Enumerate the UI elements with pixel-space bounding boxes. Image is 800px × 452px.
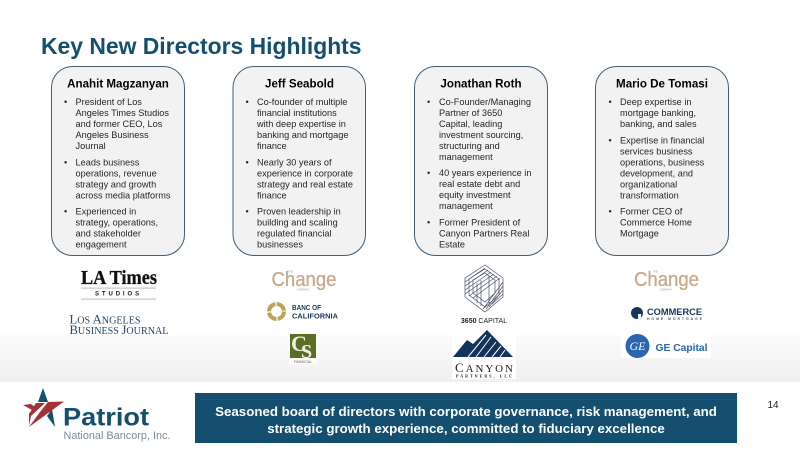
bullets: Jonathan Roth: structuring and — [439, 141, 500, 151]
logo: The Change Company (De Tomasi): THE — [653, 270, 658, 274]
bullets: Jonathan Roth: • — [427, 97, 430, 107]
bullets: Anahit Magzanyan: and former CEO, Los — [76, 119, 163, 129]
logo: Patriot National Bancorp: National Bancorp, Inc. — [64, 430, 170, 442]
bullets: Jonathan Roth — [427, 97, 531, 250]
bullets: Anahit Magzanyan: Journal — [76, 141, 106, 151]
logo: The Change Company (Seabold): THE — [288, 270, 293, 274]
logo: GE Capital: GE Capital — [656, 342, 708, 354]
name: Jonathan Roth: Jonathan Roth — [440, 78, 522, 90]
logo: Los Angeles Business Journal — [70, 312, 168, 337]
bullets: Jonathan Roth: • — [427, 218, 430, 228]
name: Anahit Magzanyan: Anahit Magzanyan — [67, 78, 169, 90]
logo: CS Financial: S — [301, 341, 312, 363]
logo: Canyon Partners: PARTNERS, LLC — [456, 374, 512, 378]
bullets: Mario De Tomasi: development, and — [620, 168, 693, 178]
logo: Canyon Partners — [452, 329, 516, 379]
bullets: Mario De Tomasi: • — [608, 136, 612, 146]
bullets: Anahit Magzanyan: engagement — [76, 240, 127, 250]
logo: LA Times Studios: STUDIOS — [95, 292, 142, 298]
bullets: Anahit Magzanyan: operations, revenue — [76, 168, 157, 178]
icon: star — [23, 388, 64, 427]
bullets: Jonathan Roth: • — [427, 168, 430, 178]
bullets: Jonathan Roth: investment sourcing, — [439, 130, 523, 140]
logo: LA Times Studios — [81, 267, 157, 300]
bullets: Anahit Magzanyan: • — [64, 158, 67, 168]
bullets: Mario De Tomasi: Former CEO of — [620, 206, 683, 216]
logo: Canyon Partners: CANYON — [455, 360, 513, 375]
bullets: Anahit Magzanyan: President of Los — [76, 97, 142, 107]
bullets: Mario De Tomasi: organizational — [620, 180, 677, 190]
bullets: Jeff Seabold: regulated financial — [257, 228, 332, 238]
logo: Commerce Home Mortgage: COMMERCE — [647, 307, 702, 317]
logo: GE Capital: GE — [630, 339, 646, 353]
bullets: Mario De Tomasi: Commerce Home — [620, 218, 692, 228]
bullets: Jonathan Roth: Canyon Partners Real — [439, 228, 529, 238]
logo: Banc of California: CALIFORNIA — [292, 314, 338, 320]
bullets: Jeff Seabold: Co-founder of multiple — [257, 97, 347, 107]
logo: LA Times Studios: LA Times — [81, 267, 157, 289]
logo: Commerce Home Mortgage — [631, 307, 703, 321]
bullets: Jeff Seabold: building and scaling — [257, 218, 338, 228]
bullets: Anahit Magzanyan: strategy and growth — [76, 180, 156, 190]
panel: Jonathan Roth — [414, 66, 548, 256]
bullets: Jonathan Roth: Capital, leading — [439, 119, 502, 129]
logo: Los Angeles Business Journal: BUSINESS JOURNAL — [70, 323, 168, 337]
bullets: Jonathan Roth: management — [439, 152, 493, 162]
bullets: Jonathan Roth: 40 years experience in — [439, 168, 531, 178]
bullets: Jeff Seabold: financial institutions — [257, 108, 337, 118]
logo: The Change Company (De Tomasi): Change — [634, 269, 699, 291]
bullets: Mario De Tomasi: transformation — [620, 190, 679, 200]
bullets: Mario De Tomasi: • — [608, 206, 612, 216]
bullets: Jonathan Roth: management — [439, 201, 493, 211]
bullets: Jonathan Roth: equity investment — [439, 190, 511, 200]
bullets: Jeff Seabold: • — [246, 206, 249, 216]
panel: Mario De Tomasi — [596, 66, 728, 256]
logo: Banc of California — [269, 304, 338, 320]
bullets: Anahit Magzanyan: Experienced in — [76, 206, 136, 216]
bullets: Mario De Tomasi: banking, and sales — [620, 119, 697, 129]
bullets: Jeff Seabold: businesses — [257, 240, 303, 250]
bullets: Jeff Seabold — [246, 97, 353, 250]
bullets: Anahit Magzanyan: across media platforms — [76, 190, 171, 200]
logo: CS Financial: FINANCIAL — [294, 360, 312, 364]
logo: Patriot National Bancorp — [23, 388, 170, 442]
bullets: Jeff Seabold: • — [246, 97, 249, 107]
panel: Anahit Magzanyan — [52, 66, 184, 256]
bullets: Mario De Tomasi: services business — [620, 146, 693, 156]
callout banner: strategic growth experience, committed to fiduciary excellence — [267, 421, 665, 436]
logo: CS Financial — [289, 331, 317, 364]
logo: Banc of California: BANC OF — [292, 305, 322, 312]
bullets: Mario De Tomasi: mortgage banking, — [620, 108, 696, 118]
bullets: Jeff Seabold: finance — [257, 141, 287, 151]
logo: The Change Company (Seabold): COMPANY — [297, 288, 310, 292]
callout banner — [195, 393, 737, 443]
bullets: Mario De Tomasi: • — [608, 97, 612, 107]
bullets: Mario De Tomasi: operations, business — [620, 158, 705, 168]
bullets: Anahit Magzanyan: Leads business — [76, 158, 140, 168]
bullets: Jeff Seabold: banking and mortgage — [257, 130, 348, 140]
page number: 14 — [767, 400, 779, 411]
name: Mario De Tomasi: Mario De Tomasi — [616, 78, 708, 90]
bullets: Anahit Magzanyan: Angeles Times Studios — [76, 108, 169, 118]
logo: CS Financial: C — [291, 331, 307, 356]
bullets: Anahit Magzanyan: • — [64, 97, 67, 107]
bullets: Mario De Tomasi — [608, 97, 705, 238]
bullets: Mario De Tomasi: Mortgage — [620, 228, 659, 238]
bullets: Jonathan Roth: Partner of 3650 — [439, 108, 502, 118]
logo: The Change Company (Seabold): Change — [272, 269, 336, 291]
logo: Los Angeles Business Journal: LOS ANGELES — [70, 312, 140, 326]
bullets: Jeff Seabold: experience in corporate — [257, 168, 353, 178]
name: Jeff Seabold: Jeff Seabold — [265, 78, 334, 90]
bullets: Anahit Magzanyan: Angeles Business — [76, 130, 149, 140]
logo: The Change Company (De Tomasi): COMPANY — [660, 288, 673, 292]
bullets: Jeff Seabold: Nearly 30 years of — [257, 158, 332, 168]
bullets: Anahit Magzanyan: • — [64, 206, 67, 216]
bullets: Jeff Seabold: strategy and real estate — [257, 180, 353, 190]
bullets: Anahit Magzanyan: and stakeholder — [76, 228, 141, 238]
bullets: Jonathan Roth: Estate — [439, 240, 465, 250]
bullets: Anahit Magzanyan: strategy, operations, — [76, 218, 158, 228]
logo: 3650 Capital: 3650 CAPITAL — [461, 318, 507, 325]
logo: Commerce Home Mortgage: HOME MORTGAGE — [647, 317, 703, 321]
logo: Patriot National Bancorp: Patriot — [63, 404, 150, 432]
panel: Jeff Seabold — [233, 66, 366, 256]
bullets: Mario De Tomasi: Deep expertise in — [620, 97, 692, 107]
logo: GE Capital — [621, 334, 711, 358]
bullets: Jonathan Roth: real estate debt and — [439, 179, 520, 189]
bullets: Jeff Seabold: Proven leadership in — [257, 206, 341, 216]
logo: 3650 Capital — [461, 265, 507, 325]
bullets: Mario De Tomasi: Expertise in financial — [620, 136, 704, 146]
callout banner: Seasoned board of directors with corporate governance, risk management, and — [215, 404, 717, 419]
bullets: Anahit Magzanyan — [64, 97, 171, 250]
bullets: Jeff Seabold: with deep expertise in — [256, 119, 346, 129]
bullets: Jeff Seabold: • — [246, 158, 249, 168]
title: Key New Directors Highlights — [41, 33, 362, 59]
bullets: Jeff Seabold: finance — [257, 190, 287, 200]
bullets: Jonathan Roth: Former President of — [439, 218, 521, 228]
bullets: Jonathan Roth: Co-Founder/Managing — [439, 97, 531, 107]
